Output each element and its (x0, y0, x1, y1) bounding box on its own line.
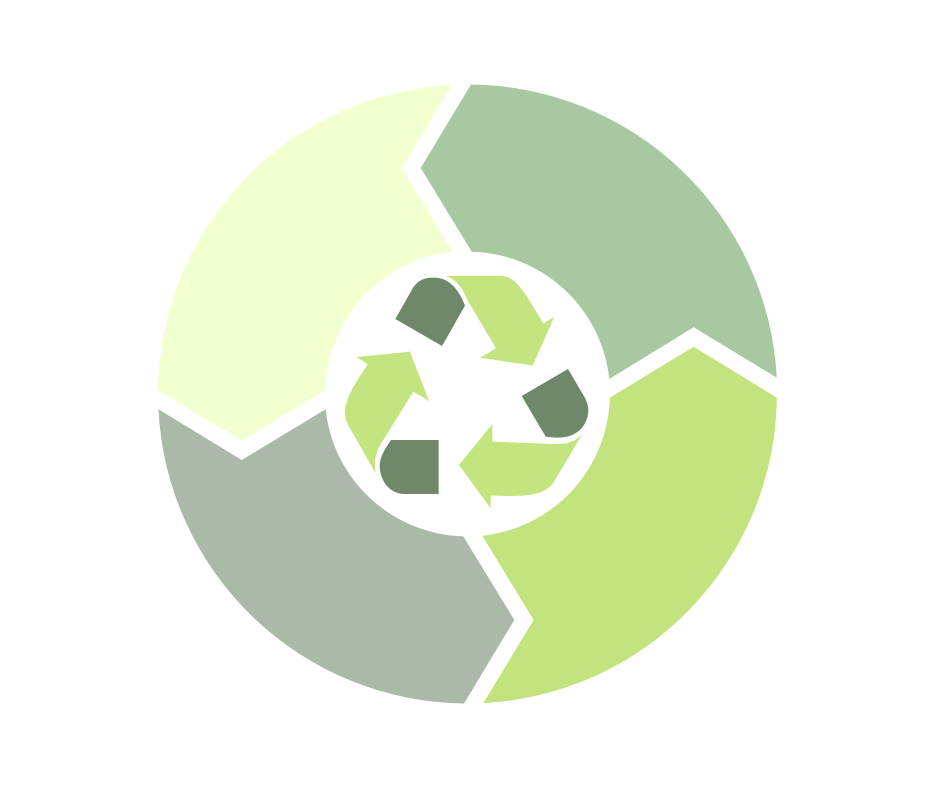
icon: top arrow tail (395, 278, 465, 346)
icon: left arrow (345, 352, 429, 473)
icon: lower left arrow tail (380, 440, 439, 494)
icon: lower right arrow (459, 424, 583, 508)
ring segment: grey green, lower left (158, 409, 514, 704)
ring segment: sage green, upper right (421, 84, 777, 379)
ring segment: lime green, lower right (482, 347, 777, 703)
icon: right arrow tail (522, 369, 588, 438)
ring segment: pale yellow, upper left (158, 85, 452, 441)
icon: recycling symbol (345, 276, 588, 508)
icon: top arrow (445, 276, 554, 366)
